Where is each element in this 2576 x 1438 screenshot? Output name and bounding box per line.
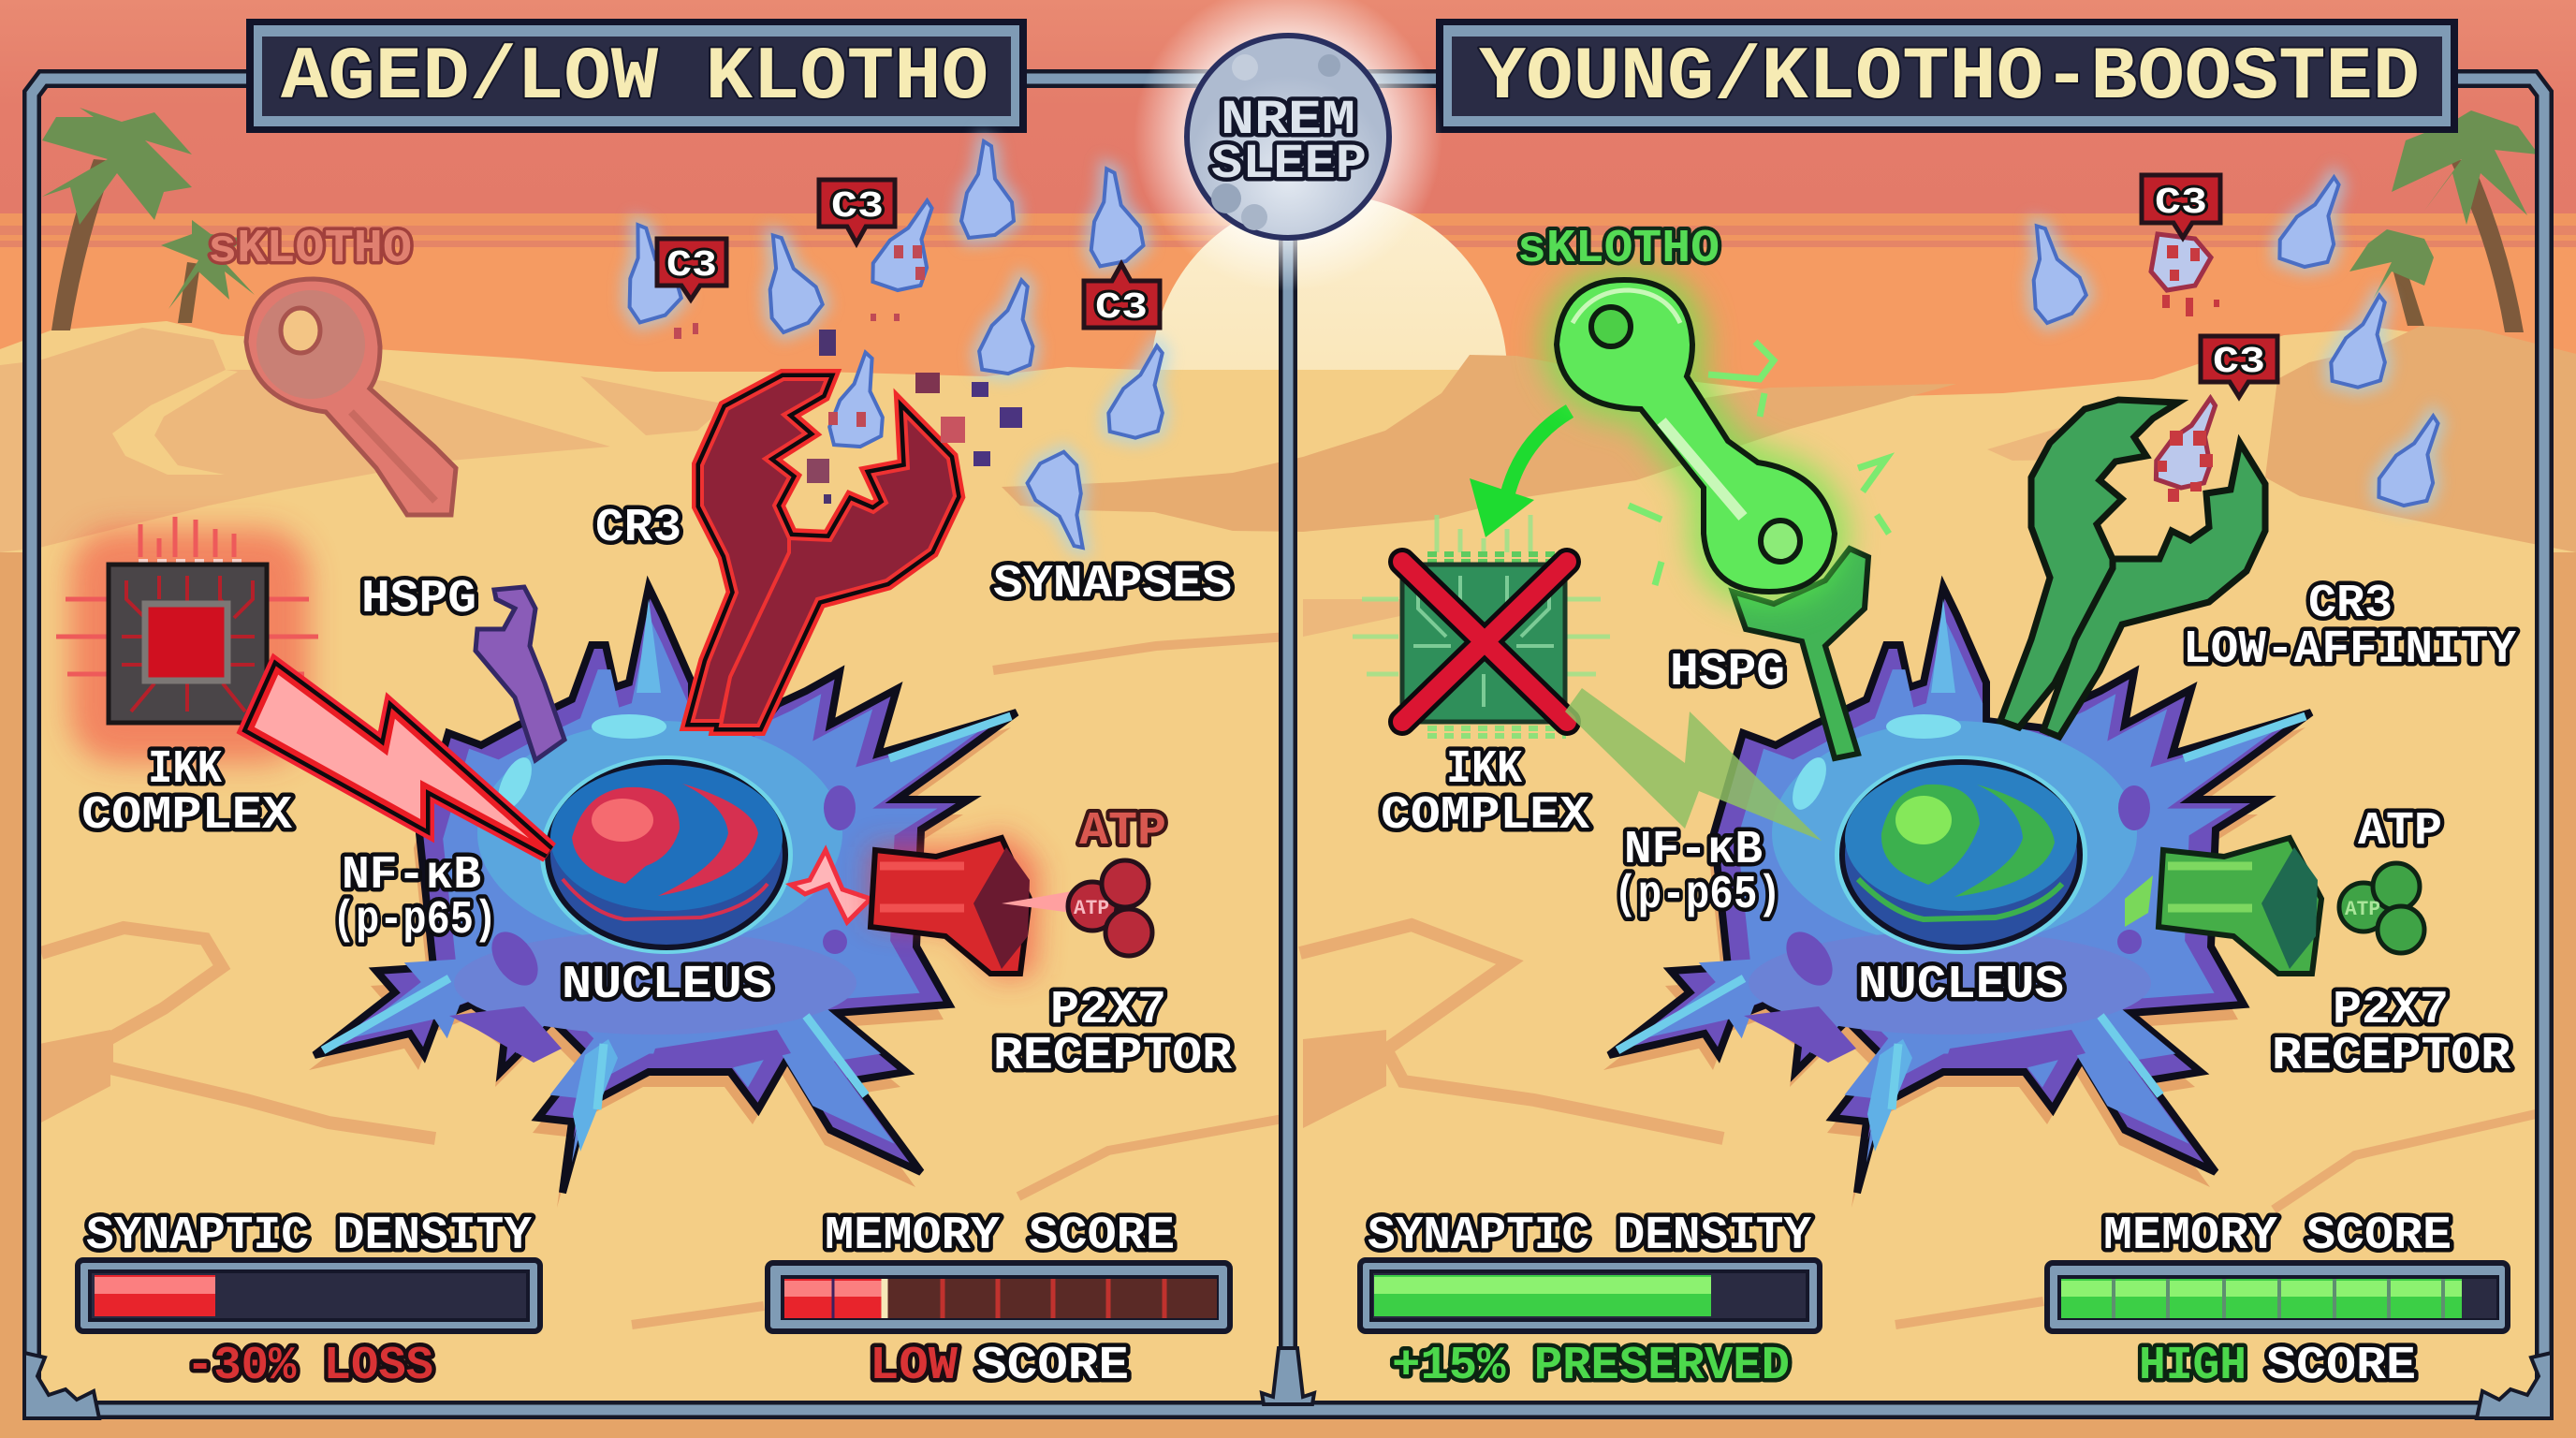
CR3 claw left [693,379,955,726]
left title banner [246,19,1027,133]
label: HSPG: HSPG [361,573,476,626]
moon badge: NREM sleep [1134,0,1442,291]
C3 tags left: C3 [831,186,884,228]
arrow: activation lightning left [251,670,549,852]
NREM: NREM [1221,93,1355,148]
icon: glowing sKLOTHO key [1557,280,1889,592]
label: COMPLEX: COMPLEX [81,789,292,843]
stat: plus 15 percent preserved: +15% PRESERVED [1392,1340,1790,1393]
CR3 claw right [2000,400,2265,737]
stat: high score: HIGH [2139,1340,2247,1393]
label: memory score right: MEMORY SCORE [2103,1210,2452,1263]
C3 tags right: C3 [2213,342,2265,384]
synapses right [2015,168,2460,516]
bar: synaptic density low [78,1260,540,1331]
palm trees [42,108,2539,332]
icon: ATP cluster left [1068,860,1152,956]
label: SYNAPSES: SYNAPSES [993,558,1232,611]
label: p-p65 right: (p-p65) [1614,869,1781,922]
panel: aged / low klotho [56,141,1232,1393]
stat: low score: LOW [870,1340,958,1393]
icon: blocked IKK chip [1353,515,1610,736]
label: CR3: CR3 [595,502,681,555]
label: sKLOTHO faded: sKLOTHO [208,223,412,276]
bar: synaptic density preserved [1360,1260,1820,1331]
label: NF-kB: NF-κB [342,849,481,902]
icon: ATP cluster left: ATP [1074,897,1109,920]
damaged synapses right [2149,234,2237,498]
nucleus right [1835,756,2087,954]
label: IKK: IKK [148,743,222,797]
arrow: green curve to chip [1470,411,1570,537]
title: young/klotho-boosted: YOUNG/KLOTHO-BOOSTED [1479,36,2420,121]
right title banner [1436,19,2458,133]
stat: low score [870,1340,1129,1393]
C3 tags right [2142,175,2277,397]
label: RECEPTOR right: RECEPTOR [2272,1030,2510,1083]
label: P2X7: P2X7 [1050,984,1166,1037]
synapse damage marks right [2158,245,2219,502]
label: p-p65: (p-p65) [332,894,497,947]
icon: P2X7 receptor right [2125,838,2321,974]
icon: P2X7 receptor left [871,833,1072,978]
label: ATP right: ATP [2358,805,2442,858]
HSPG receptor right [1733,549,1868,758]
stat: high score [2139,1340,2416,1393]
label: RECEPTOR: RECEPTOR [993,1030,1232,1083]
label: NF-kB right: NF-κB [1624,824,1763,877]
label: IKK right: IKK [1446,743,1522,797]
C3 tags left [657,180,1160,330]
synapse debris left [674,245,1022,504]
title: aged/low klotho: AGED/LOW KLOTHO [281,36,988,121]
bar: memory score low [768,1263,1230,1331]
icon: active IKK chip [56,517,318,763]
SLEEP: SLEEP [1211,137,1367,192]
C3 tags left: C3 [666,245,717,287]
arrow: blocked lightning right [1565,688,1822,841]
spark: nucleus to receptor left [791,850,871,922]
stat: minus 30 percent loss: -30% LOSS [186,1340,433,1393]
icon: ATP cluster right: ATP [2345,898,2380,921]
label: P2X7 right: P2X7 [2333,984,2449,1037]
label: synaptic density left: SYNAPTIC DENSITY [86,1210,532,1263]
label: CR3 right: CR3 [2308,578,2393,631]
nucleus left [540,756,793,954]
C3 tags left: C3 [1095,287,1148,330]
label: COMPLEX right: COMPLEX [1381,789,1589,843]
label: memory score left: MEMORY SCORE [825,1210,1175,1263]
label: NUCLEUS right: NUCLEUS [1858,959,2064,1012]
icon: red X [1402,562,1567,722]
C3 tags right: C3 [2155,183,2207,225]
icon: faded sKLOTHO key [246,279,456,515]
label: sKLOTHO glowing: sKLOTHO [1517,223,1720,276]
cell: microglia body left [309,587,1017,1208]
label: HSPG right: HSPG [1670,646,1785,699]
label: synaptic density right: SYNAPTIC DENSITY [1368,1210,1811,1263]
panel: young / klotho boosted [1353,168,2516,1393]
stat: low score: SCORE [976,1340,1129,1393]
label: LOW-AFFINITY: LOW-AFFINITY [2183,624,2516,677]
label: NUCLEUS: NUCLEUS [562,959,772,1012]
synapses left [616,141,1185,558]
HSPG receptor left [476,587,564,760]
label: ATP red: ATP [1079,805,1166,858]
stat: high score: SCORE [2266,1340,2416,1393]
cell: microglia body right [1603,587,2311,1208]
icon: ATP cluster right [2339,863,2424,953]
bar: memory score high [2047,1263,2508,1331]
